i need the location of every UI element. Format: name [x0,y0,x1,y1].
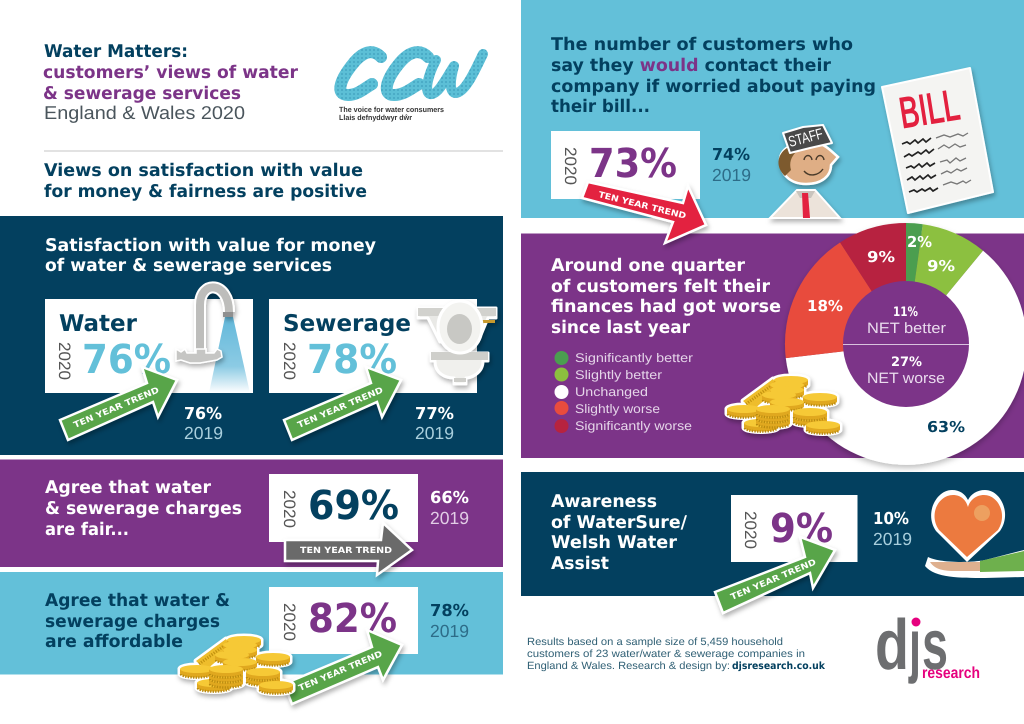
arrow: ten year trend awareness: TEN YEAR TREND [729,558,818,603]
legend: Slightly worse [575,402,660,416]
card: 69% [269,474,418,542]
panel heading [551,35,876,117]
logo: CCW: Llais defnyddwyr dŵr [339,113,412,122]
legend: Slightly better [575,368,662,382]
card: 73% [551,131,700,199]
icon: tap [176,287,233,363]
panel text: of WaterSure/ [551,513,688,533]
icon: staff member [770,125,840,218]
donut labels: NET better [867,320,946,337]
panel heading: since last year [551,318,690,338]
arrow: ten year trend awareness [715,537,835,613]
title block: Water Matters: [44,42,188,62]
panel text: Awareness [551,492,657,512]
donut labels: 9% [927,257,955,275]
donut labels: NET worse [867,370,945,387]
icon: bill [882,68,993,213]
card: 82% [269,587,418,654]
arrow: ten year trend water [60,367,177,440]
arrow: ten year trend contact [582,182,706,243]
panel text: are affordable [45,632,183,652]
donut labels: 63% [927,418,965,436]
card: sewerage: 2020 [280,342,298,380]
card: sewerage: 78% [307,337,397,383]
card: 82%: 82% [308,596,397,642]
panel text: Assist [551,554,609,574]
icon: toilet [418,301,496,384]
card: 9% [731,495,858,562]
footer note: England & Wales. Research & design by: [527,660,730,672]
heading: views on satisfaction: for money & fairness are positive [44,182,367,202]
panel: charges are fair [0,460,503,567]
icon: staff member: STAFF [787,125,825,151]
panel heading: say they would contact their [551,56,831,76]
panel text: Agree that water [45,478,211,498]
panel: satisfaction with value for money [0,216,503,455]
stat: contact 2019: 2019 [712,165,751,185]
legend: Significantly worse [575,419,692,433]
donut labels: 18% [807,297,843,315]
logo: djs research: research [922,665,980,682]
icon: bill: BILL [896,81,963,138]
card: water [45,299,253,393]
icon: water spray [209,317,250,393]
donut labels [807,233,965,436]
arrow: ten year trend fair: TEN YEAR TREND [300,546,392,556]
footer note: djsresearch.co.uk [732,661,825,672]
panel: finances [521,234,1024,458]
panel text [45,478,242,540]
logo: djs research: d [875,606,909,685]
icon: heart in hand [925,490,1024,578]
panel: contact company [521,0,1024,218]
arrow: ten year trend contact: TEN YEAR TREND [597,190,687,222]
arrow: ten year trend sewerage [284,367,401,440]
stat: water 2019: 76% [184,404,222,423]
stat: affordable 2019: 78% [430,601,469,620]
donut labels: 2% [907,233,932,251]
donut labels: 9% [867,248,895,266]
logo: djs research: j [908,606,921,685]
card: 73%: 2020 [561,147,579,185]
donut labels: 27% [891,355,922,370]
stat: contact 2019: 74% [712,145,750,164]
stat: affordable 2019: 2019 [430,621,469,641]
stat: contact 2019 [712,145,751,185]
stat: fair 2019: 66% [430,488,469,507]
icon: coins left [180,636,293,694]
panel text: Agree that water & [45,591,230,611]
panel heading: The number of customers who [551,35,853,55]
legend: Unchanged [575,385,648,399]
stat: affordable 2019 [430,601,469,641]
panel heading: finances had got worse [551,297,781,317]
card: water: 76% [82,337,171,383]
panel: WaterSure awareness [521,472,1024,596]
card: 82%: 2020 [280,603,298,641]
footer note: Results based on a sample size of 5,459 household [527,636,783,648]
heading: views on satisfaction [44,161,367,202]
panel: charges are affordable [0,572,503,674]
arrow: ten year trend fair [285,523,412,575]
legend: Significantly better [575,351,693,365]
panel text: & sewerage charges [45,499,242,519]
card: 69%: 69% [308,483,399,529]
stat: fair 2019: 2019 [430,508,469,528]
title block: & sewerage services [43,84,241,104]
arrow: ten year trend affordable [284,630,402,704]
card: sewerage [269,299,477,393]
card: 73%: 73% [589,141,677,187]
stat: awareness 2019 [873,509,912,549]
card: water: Water [59,311,138,337]
footer note [527,636,825,672]
panel heading: their bill... [551,97,650,117]
arrow: ten year trend water: TEN YEAR TREND [72,386,161,431]
legend [554,351,693,433]
panel text [551,492,688,574]
stat: water 2019 [184,404,223,443]
panel heading: Satisfaction with value for money [45,236,377,256]
title block: England & Wales 2020 [44,102,245,123]
logo: CCW: The voice for water consumers [339,105,444,114]
panel heading [45,236,377,276]
stat: awareness 2019: 2019 [873,529,912,549]
panel text: sewerage charges [45,612,220,632]
logo: djs research [875,606,980,685]
panel heading: of customers felt their [551,277,770,297]
card: 9%: 9% [770,506,833,552]
stat: fair 2019 [430,488,469,528]
donut labels: 11% [893,305,918,320]
title block [43,42,298,123]
arrow: ten year trend affordable: TEN YEAR TREND [297,649,384,694]
card: water: 2020 [55,342,73,380]
heading: views on satisfaction: Views on satisfaction with value [44,161,363,181]
panel heading: of water & sewerage services [45,256,332,276]
panel text: are fair... [45,520,129,540]
card: 69%: 2020 [280,490,298,528]
donut chart [785,223,1024,465]
stat: sewerage 2019: 77% [415,404,454,423]
panel heading: Around one quarter [551,256,745,276]
icon: coins right [727,376,840,434]
panel text [45,591,230,652]
panel heading [551,256,781,338]
stat: water 2019: 2019 [184,423,223,443]
arrow: ten year trend sewerage: TEN YEAR TREND [296,386,385,431]
title block: customers’ views of water [43,63,298,83]
panel heading: company if worried about paying [551,77,876,97]
stat: sewerage 2019 [415,404,454,443]
stat: awareness 2019: 10% [873,509,909,528]
card: 9%: 2020 [741,511,759,549]
stat: sewerage 2019: 2019 [415,423,454,443]
panel text: Welsh Water [551,533,677,553]
footer note: customers of 23 water/water & sewerage companies in [527,648,805,660]
logo: CCW [339,52,483,122]
logo: djs research: s [922,606,948,685]
heading: Sewerage: Sewerage [283,311,411,337]
